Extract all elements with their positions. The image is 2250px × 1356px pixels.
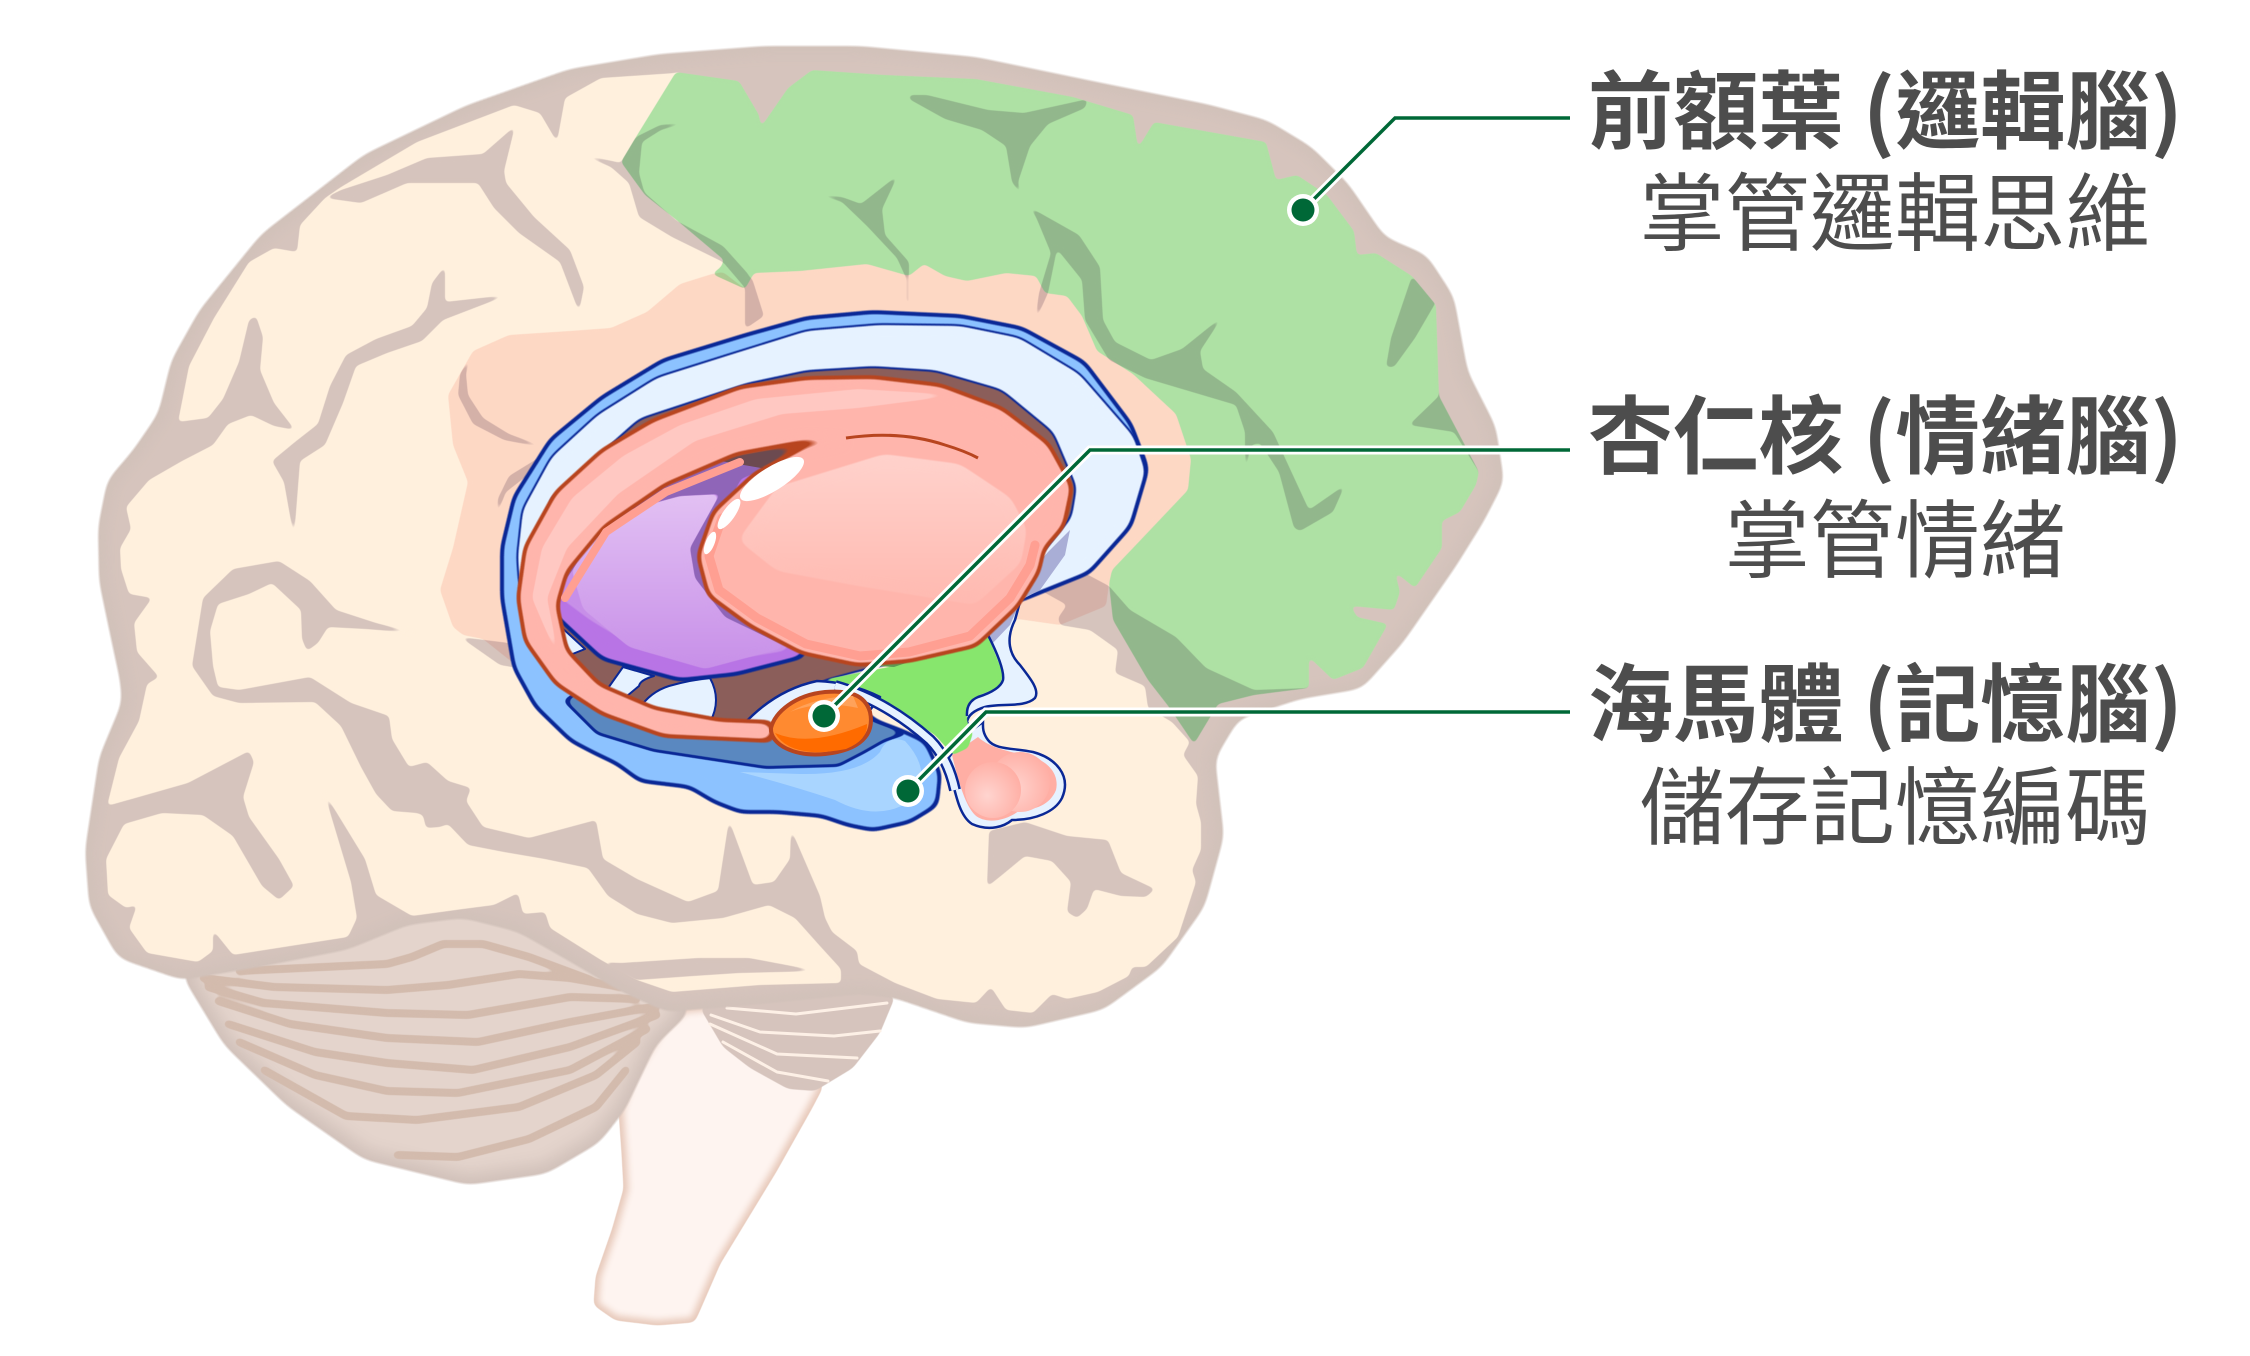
limbic peach overlay <box>440 264 1191 700</box>
heading: hippocampus: 海馬體 (記憶腦) <box>1588 636 2183 760</box>
head highlight <box>738 454 1027 605</box>
thalamus highlight <box>572 494 787 669</box>
label: amygdala <box>1588 368 2183 596</box>
cerebellum folia <box>203 944 657 1157</box>
caudate and fornix arch <box>520 379 1070 739</box>
lateral ventricle <box>504 314 1145 828</box>
cerebellum <box>188 895 685 1180</box>
label: prefrontal cortex <box>1588 43 2183 269</box>
description: prefrontal cortex: 掌管邏輯思維 <box>1639 145 2151 269</box>
frontal lobe green overlay <box>621 70 1479 744</box>
leader: prefrontal cortex <box>1287 118 1570 226</box>
thalamus <box>540 441 830 678</box>
green connector <box>822 628 1003 755</box>
description: hippocampus: 儲存記憶編碼 <box>1639 739 2151 863</box>
leader: hippocampus <box>892 712 1570 807</box>
crease <box>846 435 978 458</box>
thalamus main tone <box>550 480 790 665</box>
brown interior <box>550 368 1075 726</box>
cerebrum gyri <box>106 70 1479 1013</box>
head rim <box>709 518 1035 656</box>
dot: prefrontal cortex <box>1287 194 1319 226</box>
dot: hippocampus <box>892 775 924 807</box>
cerebrum silhouette <box>89 50 1500 1024</box>
amygdala <box>771 692 871 754</box>
label: hippocampus <box>1588 636 2183 863</box>
heading: prefrontal cortex: 前額葉 (邏輯腦) <box>1588 43 2183 167</box>
pons <box>700 960 895 1091</box>
sulci <box>272 95 1436 980</box>
upper dark wedge <box>715 441 828 468</box>
leader: amygdala <box>808 450 1570 732</box>
amygdala lower shade <box>775 724 867 752</box>
brain illustration <box>89 50 1500 1323</box>
heading: amygdala: 杏仁核 (情緒腦) <box>1588 368 2183 492</box>
arch inner rim <box>565 462 740 598</box>
thalamus shadow <box>550 456 807 647</box>
ventricle shaded band <box>567 680 902 766</box>
ventricle inner wall <box>518 325 1145 615</box>
fornix band <box>743 681 955 790</box>
mammillary bulb <box>952 737 1057 821</box>
shadow under head <box>985 530 1070 645</box>
choroid gaps <box>560 626 716 722</box>
brainstem <box>596 1000 820 1323</box>
hippocampal bulb halo <box>947 722 1065 828</box>
amygdala upper highlight <box>790 696 858 712</box>
description: amygdala: 掌管情緒 <box>1725 472 2065 596</box>
bulb lobes <box>990 752 1050 812</box>
ventricle highlight <box>740 739 922 812</box>
right ventricle wall <box>950 598 1036 737</box>
white glints <box>701 449 810 556</box>
pons streaks <box>710 1003 887 1081</box>
dot: amygdala <box>808 700 840 732</box>
arch highlight <box>532 389 960 663</box>
